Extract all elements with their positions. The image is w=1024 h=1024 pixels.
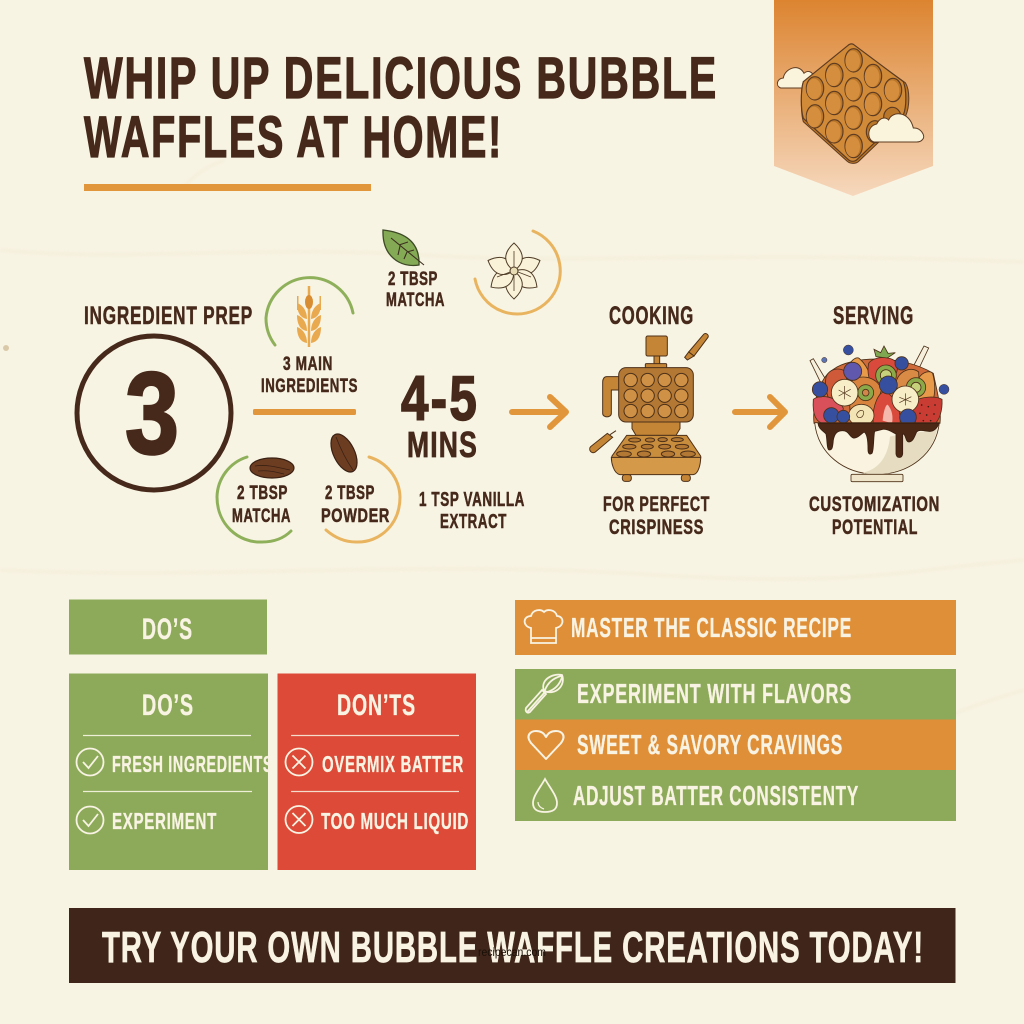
label: vanilla extract [419,489,525,533]
icon: cross [286,748,312,776]
label: for perfect crispiness: FOR PERFECT [603,493,710,516]
banner with waffle icon [774,0,933,196]
icon: check [76,806,104,834]
big number 3 in circle [77,336,231,490]
label: 2 tbsp matcha lower: 2 TBSP [237,482,288,504]
icon: vanilla flower in orange arc [475,231,560,314]
item: overmix batter: OVERMIX BATTER [322,751,464,777]
big number 3 in circle: 3 [125,348,179,478]
label: customization potential: CUSTOMIZATION [809,493,940,516]
icon: left cloud [777,68,814,88]
icon: check [76,748,104,776]
icon: chef hat [525,610,562,643]
orange connector line [253,409,356,415]
item: experiment: EXPERIMENT [112,808,217,834]
label: for perfect crispiness: CRISPINESS [609,516,704,539]
panel: don'ts [278,674,476,870]
label: 3 main ingredients: INGREDIENTS [261,375,358,397]
icon: leaf [383,230,424,265]
icon: cross [286,806,312,833]
label: customization potential [809,493,940,539]
icon: right cloud [869,114,924,142]
label: for perfect crispiness [603,493,710,539]
icon: fruit bowl with chocolate [810,345,949,482]
label: vanilla extract: 1 TSP VANILLA [419,489,525,511]
text: MASTER THE CLASSIC RECIPE [571,612,852,643]
icon: whisk [526,675,563,713]
heading: do's: DO’S [142,689,194,722]
heading: serving: SERVING [833,302,914,330]
arrow: prep to cooking [512,397,566,427]
label: 2 tbsp powder [321,482,390,527]
watermark: recipecan.com [478,945,546,959]
label: 2 tbsp matcha top: MATCHA [386,289,445,311]
tip bar: sweet and savory cravings [515,720,956,770]
icon: heart [528,731,564,759]
item: fresh ingredients: FRESH INGREDIENTS [112,751,273,777]
title: WAFFLES AT HOME! [84,105,503,170]
stat: 4-5 mins: MINS [407,424,478,465]
tip bar: master the classic recipe [515,600,956,655]
stat: 4-5 mins: 4-5 [401,364,479,434]
stat: 4-5 mins [401,364,479,465]
icon: bean in green arc [217,457,294,542]
label: customization potential: POTENTIAL [832,516,918,539]
text: SWEET & SAVORY CRAVINGS [577,729,843,760]
icon: bean in orange arc [326,430,400,542]
title: WHIP UP DELICIOUS BUBBLE [84,46,718,111]
label: 2 tbsp powder: 2 TBSP [325,482,375,504]
item: too much liquid: TOO MUCH LIQUID [321,808,469,834]
title [84,46,718,170]
label: 2 tbsp matcha top [386,268,445,311]
panel: do's header [69,600,267,654]
label: 2 tbsp powder: POWDER [321,505,390,527]
icon: water drop [533,779,557,812]
label: vanilla extract: EXTRACT [440,511,507,533]
tip bar: experiment with flavors [515,669,956,720]
text: EXPERIMENT WITH FLAVORS [577,678,852,709]
title underline [84,184,371,191]
arrow: cooking to serving [735,397,785,427]
label: 3 main ingredients: 3 MAIN [283,353,333,375]
heading: cooking: COOKING [609,302,694,330]
text: ADJUST BATTER CONSISTENTY [573,780,859,811]
heading: ingredient prep: INGREDIENT PREP [84,302,253,330]
panel: do's [69,674,273,870]
label: 3 main ingredients [261,353,358,397]
heading: don'ts: DON’TS [337,689,416,722]
label: 2 tbsp matcha top: 2 TBSP [388,268,438,290]
label: 2 tbsp matcha lower [232,482,291,527]
icon: bubble waffle [801,44,909,163]
icon: wheat in green arc [266,278,353,347]
label: 2 tbsp matcha lower: MATCHA [232,505,291,527]
call to action bar [69,908,956,983]
tip bar: adjust batter consistency [515,770,956,821]
panel: do's header: DO’S [142,613,193,646]
icon: waffle maker [590,334,708,481]
